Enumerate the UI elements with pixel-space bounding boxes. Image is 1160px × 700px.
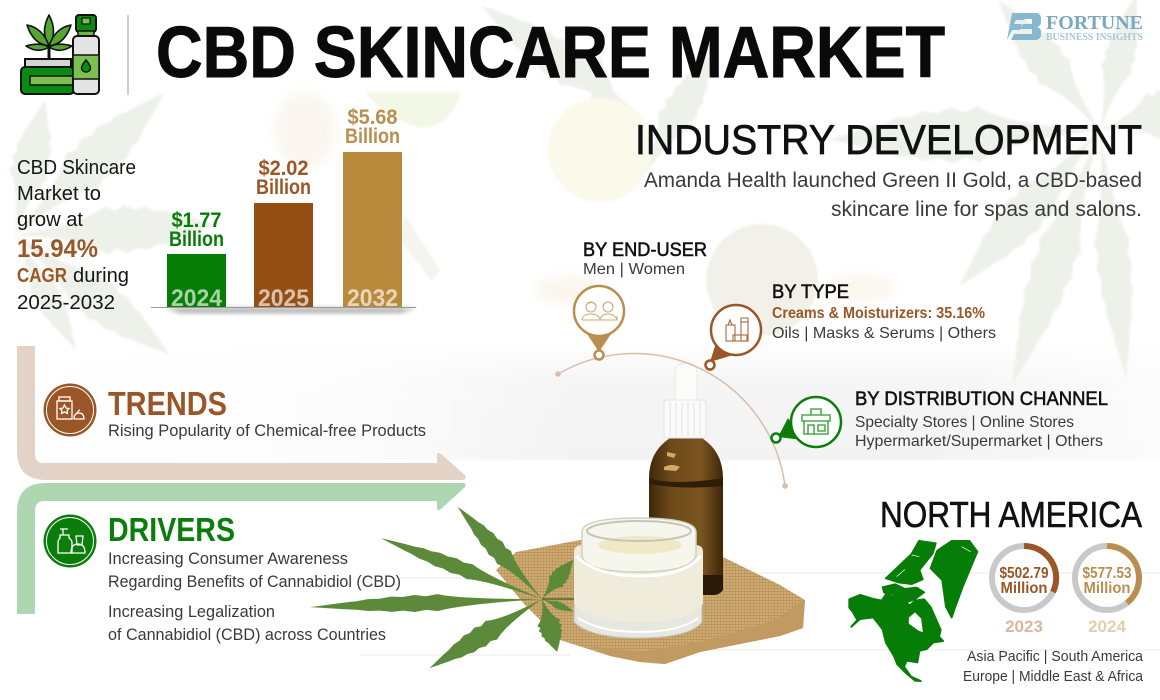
arrow: trends bbox=[17, 346, 466, 480]
icon: CBD skincare logo bbox=[21, 15, 99, 94]
text: by end-user: Men | Women bbox=[583, 261, 685, 278]
logo: Fortune Business Insights: BUSINESS INSIGHTS bbox=[1046, 32, 1143, 43]
text: other regions bbox=[963, 648, 1144, 685]
bar 2024: 2024 bbox=[171, 285, 223, 312]
divider bbox=[127, 15, 129, 95]
text: by distribution channel bbox=[855, 389, 1108, 450]
text: by type bbox=[772, 282, 996, 342]
text: other regions: Asia Pacific | South America bbox=[967, 648, 1144, 665]
text: drivers detail bbox=[108, 549, 401, 644]
text: by type: Oils | Masks & Serums | Others bbox=[772, 325, 996, 342]
map: north america bbox=[849, 541, 977, 681]
bar 2025: $2.02 bbox=[258, 157, 308, 180]
donut: 2024: 2024 bbox=[1088, 617, 1126, 636]
text: by distribution channel: Specialty Stores | Online Stores bbox=[855, 414, 1074, 431]
text: by distribution channel: Hypermarket/Supermarket | Others bbox=[855, 433, 1103, 450]
donut: 2024: Million bbox=[1084, 580, 1130, 597]
text: CAGR statement: 2025-2032 bbox=[17, 292, 115, 314]
text: industry development detail: Amanda Health launched Green II Gold, a CBD-based bbox=[644, 169, 1142, 192]
text: by type: BY TYPE bbox=[772, 282, 849, 303]
photo: hemp leaf bbox=[310, 500, 580, 678]
donut: 2023: 2023 bbox=[1005, 617, 1043, 636]
logo: Fortune Business Insights: FORTUNE bbox=[1046, 12, 1143, 34]
text: by end-user: BY END-USER bbox=[583, 240, 707, 261]
segment arc bbox=[558, 353, 785, 486]
heading: drivers: DRIVERS bbox=[108, 511, 235, 548]
text: by type: Creams & Moisturizers: 35.16% bbox=[772, 305, 985, 322]
pin: end-user bbox=[574, 286, 624, 360]
text: other regions: Europe | Middle East & Africa bbox=[963, 668, 1144, 685]
bar 2032: Billion bbox=[345, 125, 400, 148]
text: drivers detail: Increasing Consumer Awareness bbox=[108, 549, 348, 568]
bar 2032: $5.68 bbox=[348, 106, 398, 129]
pin: type bbox=[706, 305, 761, 370]
text: CAGR statement: 15.94% bbox=[17, 235, 98, 263]
donut: 2023: Million bbox=[1000, 580, 1048, 597]
photo: amber dropper bottle bbox=[649, 363, 723, 595]
bar 2024: Billion bbox=[169, 228, 224, 251]
text: CAGR statement bbox=[17, 157, 136, 314]
bar 2032: 2032 bbox=[347, 285, 398, 312]
arrow: drivers bbox=[17, 483, 466, 614]
text: by distribution channel: BY DISTRIBUTION CHANNEL bbox=[855, 389, 1108, 410]
text: trends detail: Rising Popularity of Chemical-free Products bbox=[108, 421, 426, 440]
bar 2025: 2025 bbox=[258, 285, 309, 312]
text: CAGR statement: during bbox=[73, 265, 129, 287]
text: industry development detail bbox=[644, 169, 1142, 221]
logo: Fortune Business Insights bbox=[1007, 12, 1143, 43]
donut: 2023 bbox=[992, 546, 1056, 636]
bar 2024 bbox=[167, 209, 226, 312]
text: by end-user bbox=[583, 240, 707, 278]
bar chart: market size bbox=[151, 106, 416, 313]
bar 2032 bbox=[343, 106, 402, 312]
donut: 2024: $577.53 bbox=[1082, 565, 1132, 582]
title: CBD SKINCARE MARKET bbox=[156, 13, 945, 93]
icon: drivers bbox=[44, 514, 96, 568]
bar 2024: $1.77 bbox=[172, 209, 222, 232]
photo: burlap cloth bbox=[496, 540, 805, 664]
text: drivers detail: of Cannabidiol (CBD) across Countries bbox=[108, 625, 386, 644]
text: CAGR statement: Market to bbox=[17, 183, 101, 205]
pin: distribution channel bbox=[772, 397, 841, 447]
text: CAGR statement: grow at bbox=[17, 209, 83, 231]
text: CAGR statement: CBD Skincare bbox=[17, 157, 136, 179]
icon: trends bbox=[44, 384, 96, 436]
donut: 2024 bbox=[1075, 546, 1139, 636]
donut: 2023: $502.79 bbox=[1000, 565, 1049, 582]
photo: cream jar bbox=[574, 518, 703, 638]
text: drivers detail: Increasing Legalization bbox=[108, 602, 275, 621]
bar 2025 bbox=[254, 157, 313, 312]
text: industry development detail: skincare line for spas and salons. bbox=[831, 198, 1142, 221]
text: CAGR statement: CAGR bbox=[17, 265, 67, 287]
bar 2025: Billion bbox=[256, 176, 311, 199]
text: drivers detail: Regarding Benefits of Cannabidiol (CBD) bbox=[108, 572, 401, 591]
heading: trends: TRENDS bbox=[108, 385, 227, 422]
